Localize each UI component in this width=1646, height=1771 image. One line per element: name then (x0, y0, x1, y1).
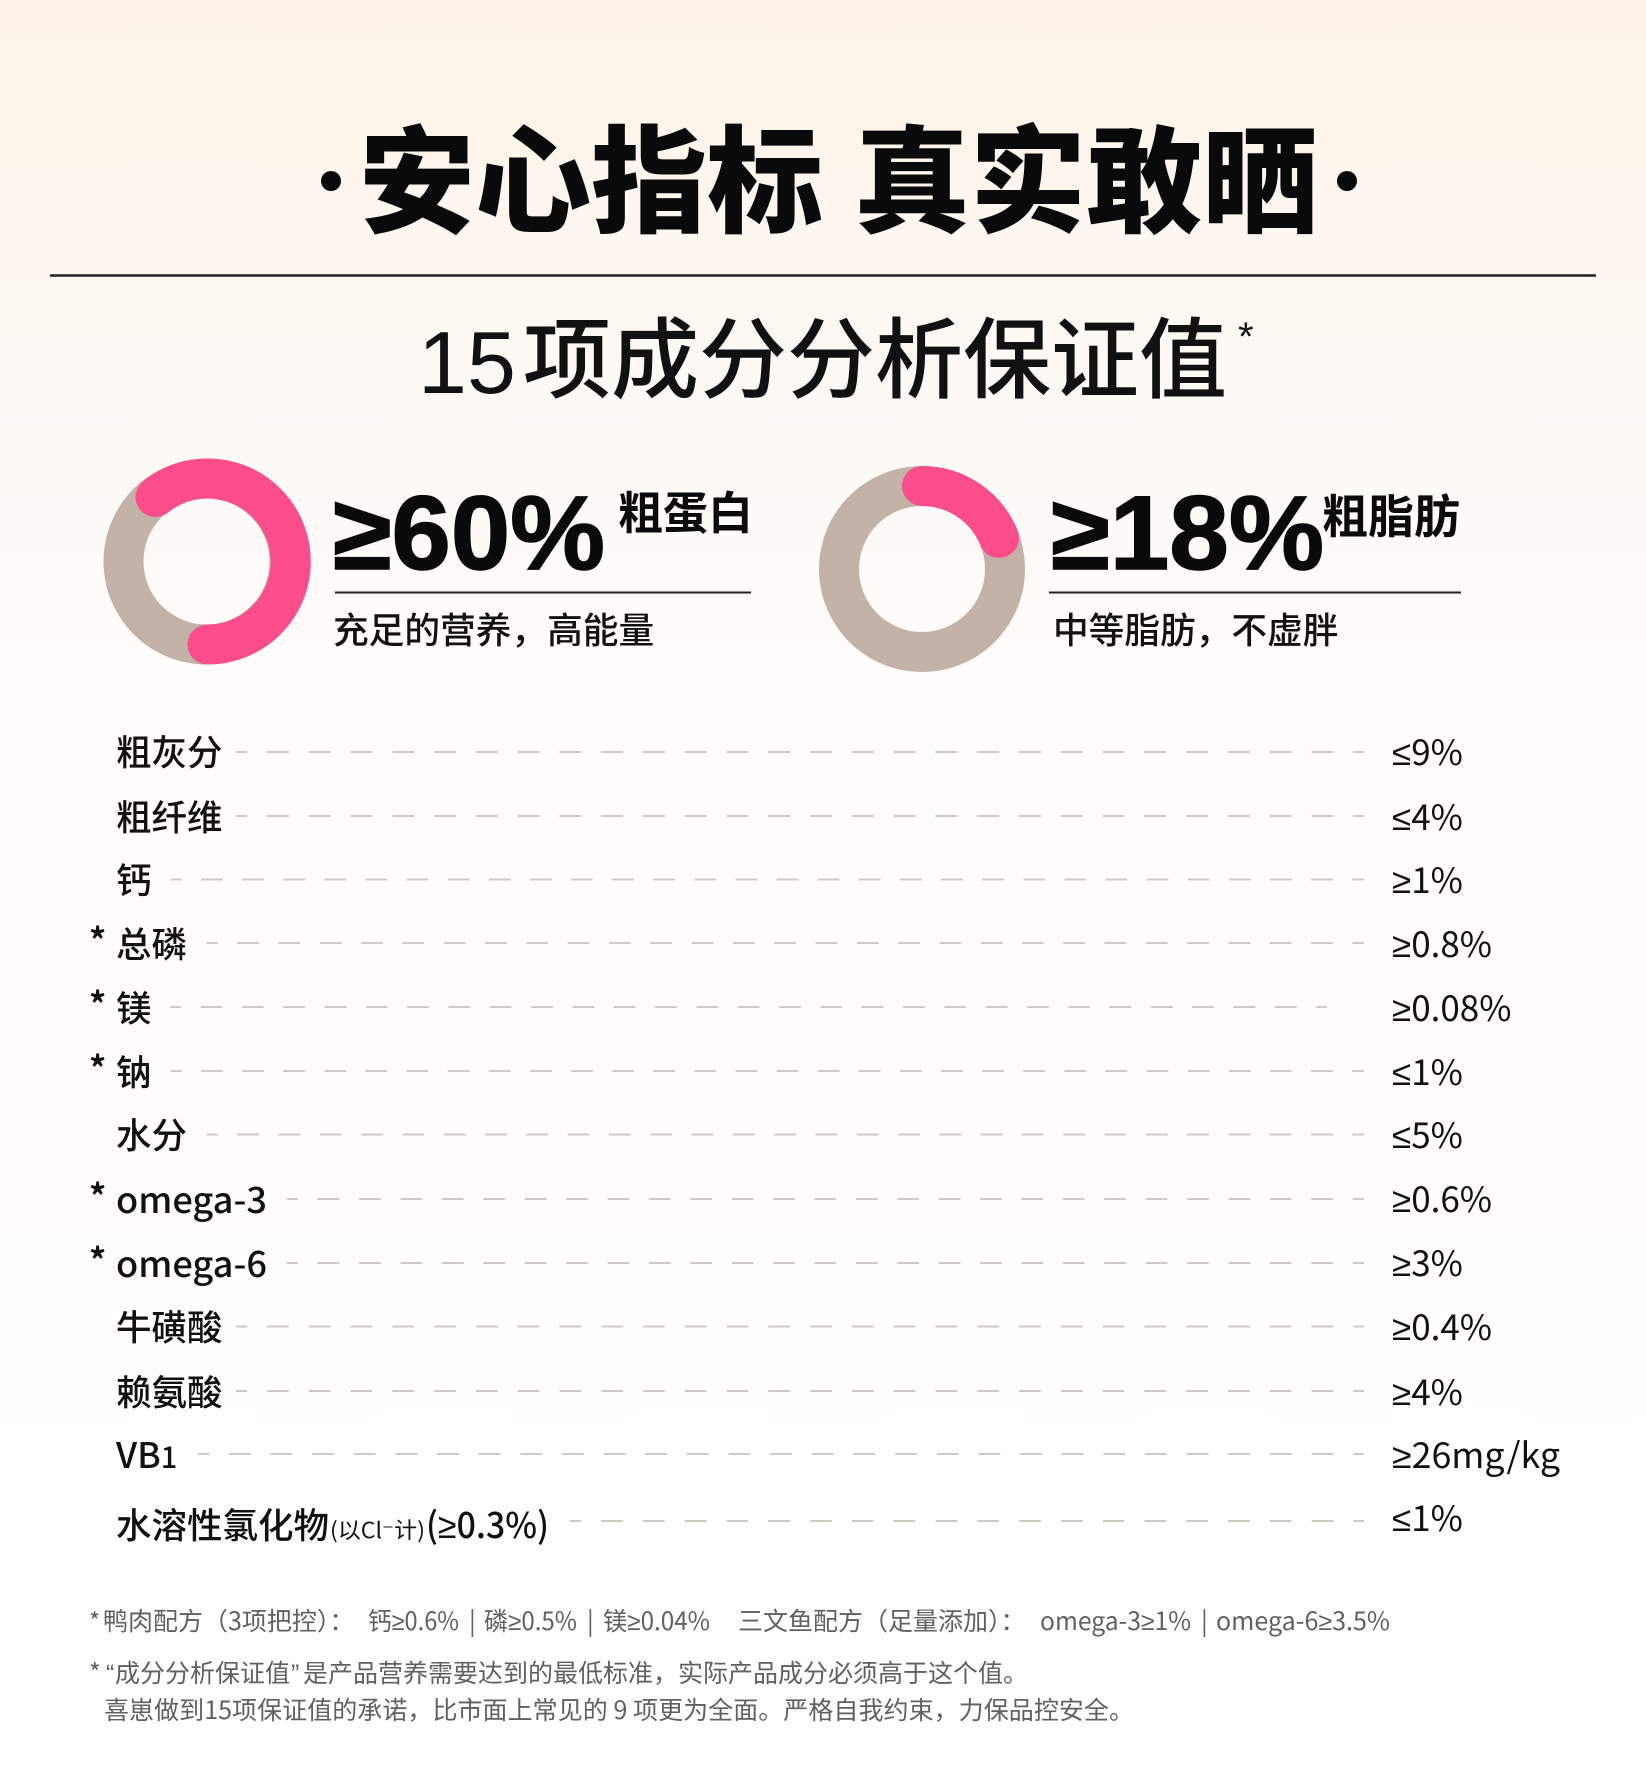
footnote: explanation (89, 1654, 1134, 1727)
row: 钠 (89, 1042, 1463, 1096)
row: 钠: ≤1% (1392, 1045, 1463, 1096)
row: 赖氨酸: ≥4% (1392, 1365, 1463, 1416)
panel: crude fat (839, 475, 1461, 654)
donut chart: 18% (839, 486, 1005, 652)
row: 钙: ≥1% (1392, 853, 1463, 904)
footnote: formula notes: 钙≥0.6% (368, 1602, 459, 1638)
row: 镁 (89, 978, 1511, 1032)
row: 粗灰分 (116, 725, 1463, 776)
caption: 中等脂肪，不虚胖 (1053, 603, 1338, 654)
row: omega-3 (89, 1170, 1492, 1224)
title: 真实敢晒 (854, 89, 1318, 257)
title: 安心指标 (359, 89, 823, 257)
row: omega-3: ≥0.6% (1392, 1172, 1492, 1223)
row: 水溶性氯化物: 水溶性氯化物 (116, 1498, 329, 1549)
row: 粗纤维: ≤4% (1392, 790, 1463, 841)
row: 水溶性氯化物: ≤1% (1392, 1491, 1463, 1542)
row: 总磷 (89, 914, 1492, 968)
footnote: explanation: 成分分析保证值 (115, 1654, 290, 1690)
row: 牛磺酸: ≥0.4% (1392, 1300, 1492, 1351)
row: 镁: ≥0.08% (1392, 981, 1511, 1032)
footnote: formula notes: 磷≥0.5% (484, 1602, 577, 1638)
footnote: formula notes (89, 1602, 1390, 1638)
subtitle: * (1238, 315, 1254, 359)
row: 水溶性氯化物: (以Cl⁻计) (330, 1513, 425, 1545)
footnote: formula notes: | (1201, 1602, 1208, 1638)
row: 总磷: * (89, 914, 106, 963)
label: 粗脂肪 (1322, 481, 1460, 547)
row: VB1: VB1 (115, 1428, 177, 1479)
footnote: formula notes: * (89, 1602, 100, 1637)
panel: crude protein (124, 475, 753, 654)
footnote: explanation: ” (291, 1660, 299, 1688)
footnote: formula notes: 鸭肉配方（3项把控）： (103, 1602, 354, 1638)
row: 总磷: ≥0.8% (1392, 917, 1492, 968)
row: 牛磺酸 (116, 1300, 1492, 1351)
row: 钙 (116, 853, 1463, 904)
row: omega-3: * (89, 1170, 106, 1219)
footnote: explanation: “ (106, 1660, 114, 1688)
row: 钠: 钠 (116, 1045, 152, 1096)
footnote: formula notes: 镁≥0.04% (603, 1602, 710, 1638)
title (321, 89, 1357, 257)
footnote: explanation: 是产品营养需要达到的最低标准，实际产品成分必须高于这个值。 (303, 1654, 1028, 1690)
row: omega-3: omega-3 (116, 1173, 267, 1224)
caption: 充足的营养，高能量 (333, 603, 654, 654)
row: 总磷: 总磷 (116, 917, 187, 968)
row: VB1 (115, 1428, 1560, 1479)
row: 赖氨酸 (116, 1365, 1463, 1416)
row: 钙: 钙 (116, 853, 152, 904)
footnote: formula notes: 三文鱼配方（足量添加）： (738, 1602, 1026, 1638)
row: 镁: * (89, 978, 106, 1027)
row: 水溶性氯化物: (≥0.3%) (426, 1498, 549, 1549)
row: omega-6: ≥3% (1392, 1236, 1463, 1287)
row: 牛磺酸: 牛磺酸 (116, 1300, 223, 1351)
footnote: formula notes: | (469, 1602, 476, 1638)
row: omega-6: * (89, 1234, 106, 1283)
footnote: formula notes: omega-6≥3.5% (1216, 1602, 1390, 1638)
row: 粗灰分: ≤9% (1392, 725, 1463, 776)
row: 水分: ≤5% (1392, 1108, 1463, 1159)
row: 水分: 水分 (116, 1108, 187, 1159)
subtitle: 15 (418, 313, 516, 412)
footnote: formula notes: | (587, 1602, 594, 1638)
row: 赖氨酸: 赖氨酸 (116, 1365, 223, 1416)
row: 粗纤维 (116, 790, 1463, 841)
row: VB1: ≥26mg/kg (1392, 1428, 1560, 1479)
row: 水溶性氯化物 (116, 1491, 1463, 1549)
table: guaranteed values (89, 725, 1560, 1549)
big figure: ≥60% (333, 475, 605, 592)
donut chart: 60% (124, 478, 291, 645)
row: 钠: * (89, 1042, 106, 1091)
row: 粗灰分: 粗灰分 (116, 725, 223, 776)
row: 粗纤维: 粗纤维 (116, 790, 223, 841)
row: 水分 (116, 1108, 1463, 1159)
subtitle: 项成分分析保证值 (523, 290, 1227, 417)
big figure: ≥18% (1051, 475, 1324, 592)
row: omega-6: omega-6 (116, 1237, 267, 1288)
footnote: formula notes: omega-3≥1% (1040, 1602, 1191, 1638)
row: omega-6 (89, 1234, 1463, 1288)
footnote: explanation: 喜崽做到15项保证值的承诺，比市面上常见的 9 项更为全面。严格自我约束，力保品控安全。 (104, 1691, 1134, 1727)
footnote: explanation: * (89, 1654, 101, 1690)
label: 粗蛋白 (618, 477, 753, 542)
row: 镁: 镁 (116, 981, 152, 1032)
